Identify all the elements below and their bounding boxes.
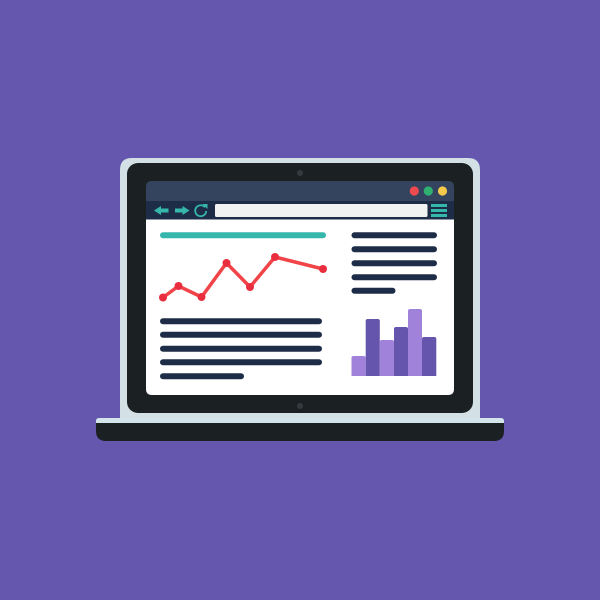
icon: hamburger menu xyxy=(431,204,447,217)
icon: back arrow xyxy=(154,206,168,215)
icon: forward arrow xyxy=(175,206,190,215)
text lines: left block xyxy=(160,318,322,379)
red button xyxy=(410,186,419,196)
bar chart xyxy=(352,309,436,376)
page area xyxy=(146,215,454,395)
text lines: right block xyxy=(352,232,437,294)
webcam xyxy=(297,170,303,176)
laptop xyxy=(96,158,504,441)
lower bezel sensor xyxy=(297,403,303,409)
browser toolbar xyxy=(146,201,454,220)
browser window xyxy=(146,181,454,395)
base top deck xyxy=(96,418,504,424)
teal heading bar xyxy=(160,232,326,238)
line chart xyxy=(159,253,327,302)
laptop lid outer frame xyxy=(120,158,480,419)
laptop bezel xyxy=(127,163,473,413)
yellow button xyxy=(438,186,447,196)
icon: reload xyxy=(195,204,208,216)
green button xyxy=(424,186,433,196)
address bar xyxy=(215,204,428,217)
browser title bar xyxy=(146,181,454,202)
laptop base xyxy=(96,418,504,441)
window buttons xyxy=(410,186,447,196)
base front xyxy=(96,423,504,441)
